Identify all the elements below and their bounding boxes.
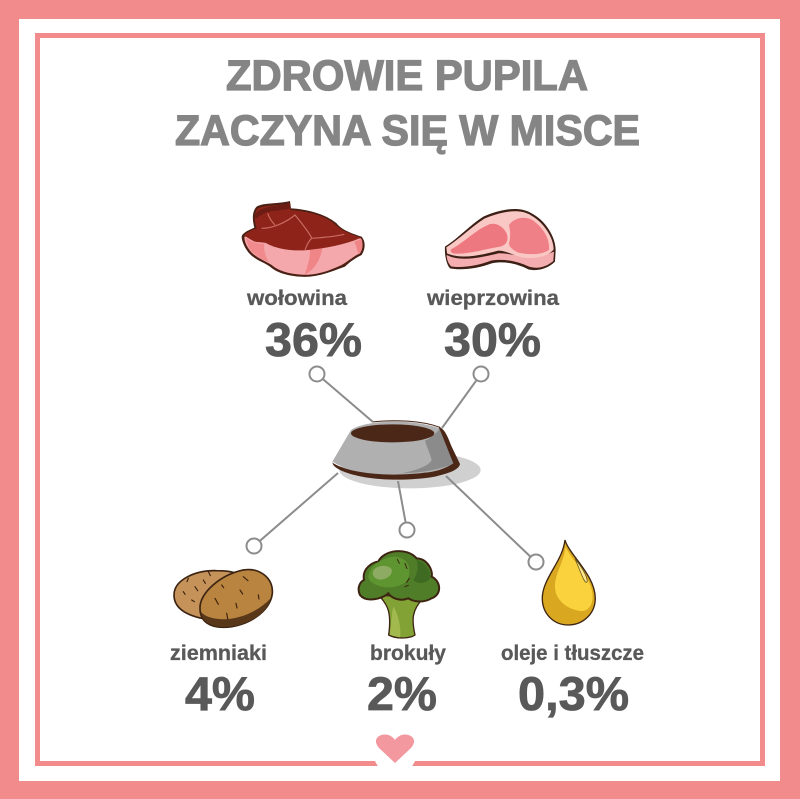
percentage values: [185, 313, 629, 720]
connector lines: [254, 374, 536, 562]
icon: dog bowl: [332, 421, 481, 488]
percentage values: 36%: [265, 313, 362, 366]
percentage values: 2%: [367, 667, 437, 720]
bowl side shade: [402, 428, 455, 473]
title: [175, 52, 640, 155]
percentage values: 30%: [444, 313, 541, 366]
category labels: wieprzowina: [426, 286, 560, 310]
bowl food: [351, 424, 434, 442]
icon: heart: [376, 734, 414, 763]
bowl top edge: [372, 421, 440, 427]
bowl shadow: [339, 452, 481, 488]
icon: potatoes: [174, 570, 272, 627]
percentage values: 0,3%: [518, 667, 629, 720]
frame notch behind heart: [373, 758, 417, 768]
icon: broccoli: [359, 551, 439, 638]
category labels: oleje i tłuszcze: [501, 641, 644, 665]
bowl rim: [332, 427, 460, 480]
icon: pork chop: [445, 209, 556, 270]
icon: oil drop: [542, 540, 595, 625]
category labels: wołowina: [246, 286, 348, 310]
icon: beef: [242, 201, 365, 277]
category labels: ziemniaki: [170, 641, 267, 665]
category labels: brokuły: [370, 641, 446, 665]
connector node circles: [246, 366, 544, 570]
title: ZACZYNA SIĘ W MISCE: [175, 107, 640, 155]
category labels: [170, 286, 644, 665]
bowl body: [332, 421, 458, 477]
percentage values: 4%: [185, 667, 255, 720]
title: ZDROWIE PUPILA: [226, 52, 588, 100]
